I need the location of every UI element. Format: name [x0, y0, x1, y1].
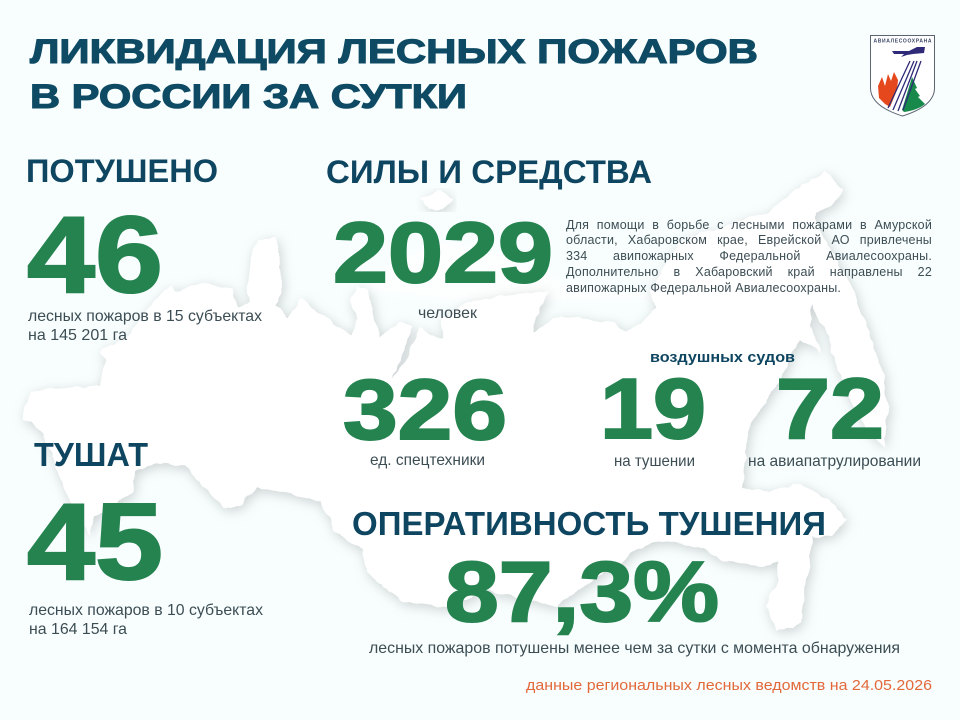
number: 45: 45	[27, 481, 163, 603]
caption: people: человек	[418, 305, 478, 322]
logo: Avialesookhrana emblem: АВИАЛЕСООХРАНА	[874, 38, 932, 44]
number: 46: 46	[27, 194, 163, 316]
caption: air patrol: на авиапатрулировании	[748, 453, 921, 470]
paragraph: aviation firefighters: Для помощи в борьбе с лесными пожарами в Амурской	[566, 218, 932, 232]
caption: 45 fires	[29, 602, 263, 638]
heading: extinguished: ПОТУШЕНО	[26, 153, 218, 189]
title: ЛИКВИДАЦИЯ ЛЕСНЫХ ПОЖАРОВ	[30, 33, 758, 71]
paragraph: aviation firefighters: авипожарных Федеральной Авиалесоохраны.	[566, 281, 841, 295]
caption: firefighting: на тушении	[614, 453, 695, 470]
number: 19: 19	[600, 362, 706, 457]
logo: Avialesookhrana emblem	[870, 36, 934, 116]
caption: 46 fires	[28, 308, 262, 344]
source note: данные региональных лесных ведомств на 24.05.2026	[526, 677, 932, 694]
caption: 46 fires: лесных пожаров в 15 субъектах	[28, 308, 262, 325]
number: 87,3%: 87,3%	[445, 545, 719, 640]
caption: 45 fires: на 164 154 га	[29, 621, 127, 638]
label: aircraft: воздушных судов	[650, 349, 795, 366]
background map of Russia	[23, 170, 888, 632]
heading: forces and means: СИЛЫ И СРЕДСТВА	[326, 154, 652, 190]
paragraph: aviation firefighters: Дополнительно в Хабаровский край направлены 22	[566, 265, 932, 279]
number: 72: 72	[776, 362, 884, 457]
paragraph: aviation firefighters: 334 авипожарных Федеральной Авиалесоохраны.	[566, 249, 932, 263]
number: 326: 326	[343, 363, 507, 458]
title	[30, 33, 758, 116]
paragraph: aviation firefighters	[566, 218, 932, 295]
number: 2029: 2029	[333, 206, 553, 301]
caption: special vehicles: ед. спецтехники	[370, 452, 485, 469]
paragraph: aviation firefighters: области, Хабаровском крае, Еврейской АО привлечены	[566, 233, 932, 247]
title: В РОССИИ ЗА СУТКИ	[30, 78, 467, 116]
caption: efficiency: лесных пожаров потушены менее чем за сутки с момента обнаружения	[369, 640, 900, 657]
heading: being extinguished: ТУШАТ	[34, 436, 148, 473]
caption: 45 fires: лесных пожаров в 10 субъектах	[29, 602, 263, 619]
caption: 46 fires: на 145 201 га	[28, 327, 127, 344]
heading: efficiency: ОПЕРАТИВНОСТЬ ТУШЕНИЯ	[352, 505, 826, 542]
